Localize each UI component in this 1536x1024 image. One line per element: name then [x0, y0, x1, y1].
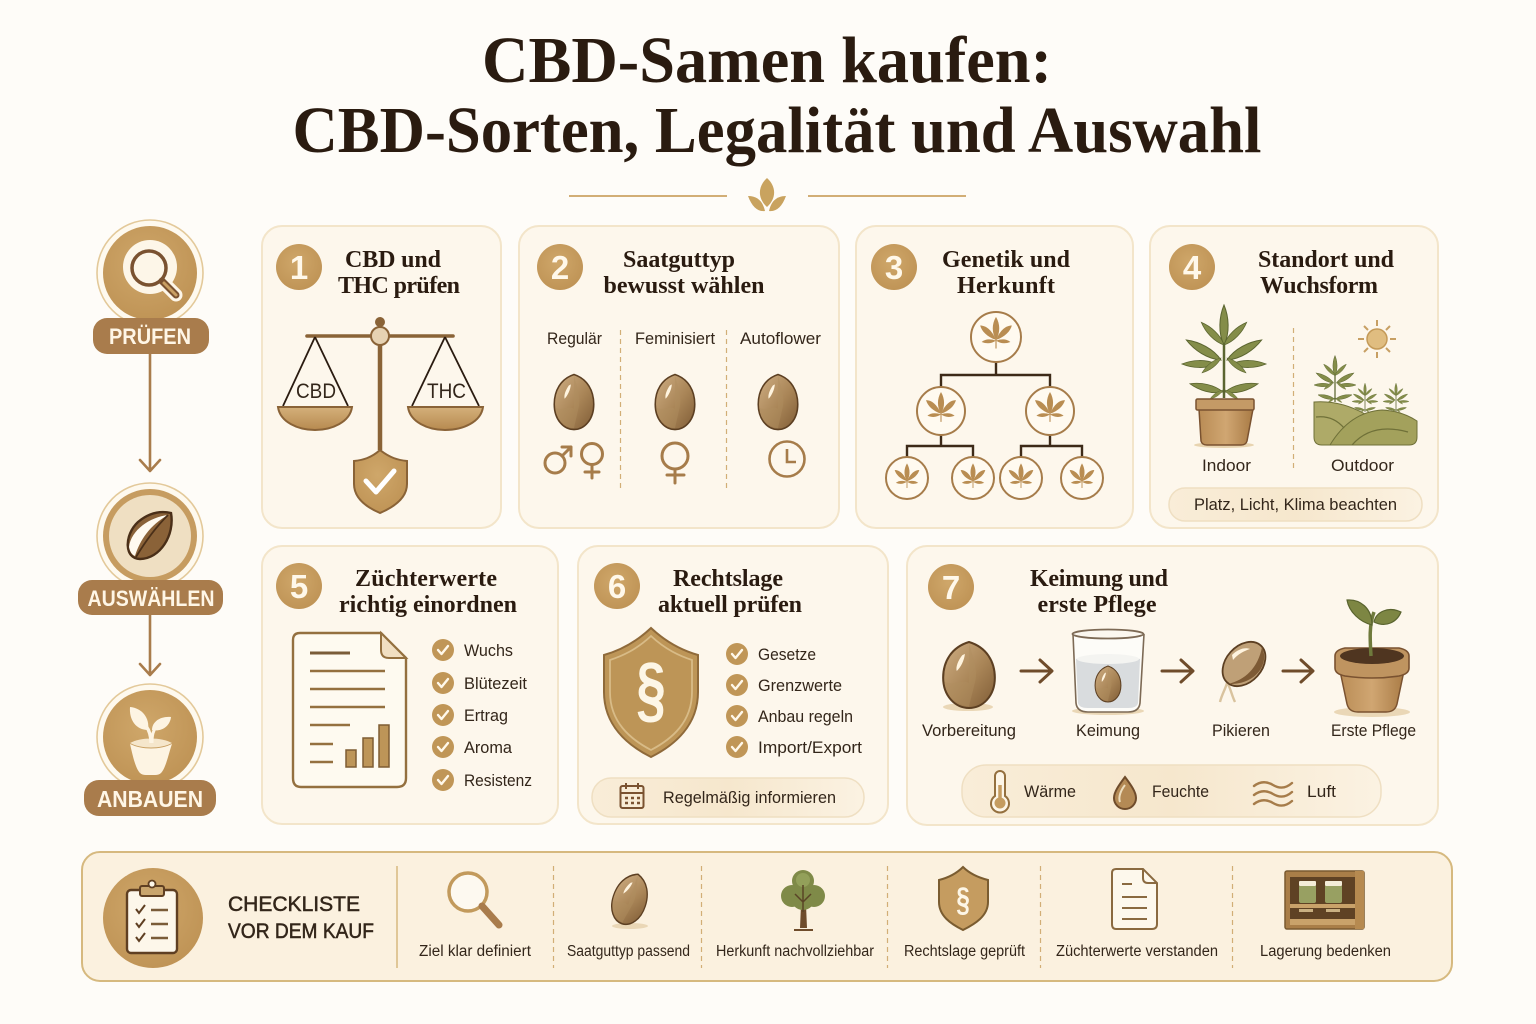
heading 2: bewusst wählen — [604, 273, 764, 299]
checklist: breeder values: Aroma — [464, 739, 513, 757]
item: Rechtslage geprüft — [904, 867, 1026, 960]
step: Pikieren — [1212, 633, 1274, 740]
number badge 7: 7 — [942, 569, 960, 606]
item: Lagerung bedenken — [1260, 871, 1391, 960]
arrow: Auswählen to Anbauen — [140, 615, 160, 675]
number badge 3: 3 — [885, 249, 903, 286]
icon: balance scale: CBD — [296, 380, 336, 403]
title: CBD-Samen kaufen: — [482, 24, 1052, 97]
icon: document with bar chart — [293, 633, 406, 787]
heading 1: THC prüfen — [338, 273, 460, 299]
step: Keimung: Keimung — [1076, 722, 1140, 740]
callout: Regelmäßig informieren: Regelmäßig informieren — [663, 789, 836, 807]
icon: shield with check — [354, 450, 407, 513]
item: Lagerung bedenken: Lagerung bedenken — [1260, 943, 1391, 960]
number badge 5 — [276, 563, 322, 609]
seed type: Autoflower: Autoflower — [740, 330, 822, 348]
icon: water drop — [1114, 777, 1136, 809]
heading 3 — [942, 247, 1071, 299]
illustration: outdoor plants on hills with sun — [1314, 320, 1417, 475]
process step: Auswählen — [78, 483, 223, 615]
heading: Checkliste: CHECKLISTE — [228, 893, 360, 916]
icon: balance scale: THC — [427, 380, 466, 403]
heading 7: erste Pflege — [1038, 592, 1157, 618]
arrow — [1162, 660, 1193, 682]
step: Vorbereitung — [922, 642, 1016, 740]
illustration: indoor potted plant: Indoor — [1202, 457, 1252, 475]
title divider with leaf ornament — [569, 178, 966, 211]
callout: Regelmäßig informieren — [592, 778, 864, 817]
title — [292, 24, 1262, 167]
item: Ziel klar definiert — [419, 873, 532, 960]
checklist: legal topics — [726, 643, 862, 758]
checklist: legal topics: Import/Export — [758, 739, 862, 757]
heading 1: CBD und — [345, 247, 442, 273]
label pill: Anbauen: ANBAUEN — [97, 786, 203, 812]
seed type: Autoflower — [740, 330, 822, 476]
checklist: legal topics: Grenzwerte — [758, 677, 842, 695]
icon: seed badge — [97, 483, 203, 589]
seed type: Regulär — [545, 330, 602, 478]
process step: Anbauen — [84, 684, 216, 816]
heading 6: aktuell prüfen — [658, 592, 802, 618]
item: Saatguttyp passend: Saatguttyp passend — [567, 943, 690, 960]
heading: Checkliste: VOR DEM KAUF — [228, 920, 374, 943]
checklist: breeder values: Blütezeit — [464, 675, 527, 693]
icon: shield with paragraph sign — [604, 628, 698, 757]
heading 2: Saatguttyp — [623, 247, 735, 273]
number badge 4: 4 — [1183, 249, 1202, 286]
icon: thermometer — [991, 771, 1009, 812]
checklist: breeder values — [432, 639, 532, 791]
icon: calendar — [620, 783, 644, 808]
heading 4: Wuchsform — [1260, 273, 1378, 299]
panel: 1 CBD und THC prüfen — [262, 226, 501, 528]
icon: sprout in pot badge — [97, 684, 203, 790]
number badge 1: 1 — [290, 249, 308, 286]
panel: 7 Keimung und erste Pflege — [907, 546, 1438, 825]
item: Züchterwerte verstanden: Züchterwerte verstanden — [1056, 943, 1218, 960]
callout: Wärme, Feuchte, Luft: Feuchte — [1152, 783, 1209, 801]
icon: clipboard badge — [103, 868, 203, 968]
heading 6 — [658, 566, 802, 618]
seed type: Feminisiert — [635, 330, 715, 483]
callout: Platz, Licht, Klima — [1169, 488, 1422, 521]
heading 5 — [339, 566, 517, 618]
arrow: Prüfen to Auswählen — [140, 354, 160, 471]
callout: Wärme, Feuchte, Luft: Wärme — [1024, 783, 1076, 801]
title: CBD-Sorten, Legalität und Auswahl — [292, 94, 1262, 167]
step: Vorbereitung: Vorbereitung — [922, 722, 1016, 740]
panel: 6 Rechtslage aktuell prüfen — [578, 546, 888, 824]
seed type: Feminisiert: Feminisiert — [635, 330, 715, 348]
number badge 1 — [276, 244, 322, 290]
family tree diagram — [886, 312, 1103, 499]
step: Keimung — [1072, 630, 1144, 740]
item: Herkunft nachvollziehbar: Herkunft nachvollziehbar — [716, 943, 874, 960]
checklist: breeder values: Ertrag — [464, 707, 508, 725]
number badge 3 — [871, 244, 917, 290]
icon: air waves — [1254, 782, 1292, 806]
heading 2 — [604, 247, 764, 299]
arrow — [1021, 660, 1052, 682]
illustration: outdoor plants on hills with sun: Outdoor — [1331, 457, 1395, 475]
item: Ziel klar definiert: Ziel klar definiert — [419, 943, 532, 960]
step: Pikieren: Pikieren — [1212, 722, 1270, 740]
checklist: legal topics: Anbau regeln — [758, 708, 853, 726]
heading 4 — [1258, 247, 1395, 299]
heading: Checkliste — [228, 893, 374, 943]
icon: magnifier badge — [97, 220, 203, 326]
number badge 4 — [1169, 244, 1215, 290]
checklist: breeder values: Resistenz — [464, 772, 532, 790]
item: Rechtslage geprüft: § — [956, 881, 970, 919]
heading 7 — [1030, 566, 1169, 618]
heading 1 — [338, 247, 460, 299]
item: Saatguttyp passend — [567, 869, 690, 960]
checklist: breeder values: Wuchs — [464, 642, 513, 660]
heading 3: Herkunft — [957, 273, 1055, 299]
arrow — [1283, 660, 1313, 682]
item: Herkunft nachvollziehbar — [716, 870, 874, 960]
number badge 5: 5 — [290, 568, 308, 605]
heading 6: Rechtslage — [673, 566, 783, 592]
number badge 6: 6 — [608, 568, 626, 605]
panel: Checkliste vor dem Kauf — [82, 852, 1452, 981]
illustration: indoor potted plant — [1182, 305, 1266, 475]
heading 4: Standort und — [1258, 247, 1395, 273]
number badge 7 — [928, 564, 974, 610]
heading 7: Keimung und — [1030, 566, 1169, 592]
number badge 6 — [594, 563, 640, 609]
heading 5: richtig einordnen — [339, 592, 517, 618]
panel: 5 Züchterwerte richtig einordnen — [262, 546, 558, 824]
callout: Wärme, Feuchte, Luft — [962, 765, 1381, 817]
icon: balance scale — [278, 317, 483, 450]
item: Züchterwerte verstanden — [1056, 869, 1218, 960]
step: Erste Pflege: Erste Pflege — [1331, 722, 1416, 740]
heading 3: Genetik und — [942, 247, 1071, 273]
seed type: Regulär: Regulär — [547, 330, 602, 348]
process step: Prüfen — [93, 220, 209, 354]
label pill: Auswählen — [78, 580, 223, 615]
number badge 2: 2 — [551, 249, 569, 286]
callout: Wärme, Feuchte, Luft: Luft — [1307, 783, 1336, 801]
icon: shield with paragraph sign: § — [636, 647, 666, 730]
panel: 3 Genetik und Herkunft — [856, 226, 1133, 528]
step: Erste Pflege — [1331, 600, 1416, 740]
checklist: legal topics: Gesetze — [758, 646, 816, 664]
panel: 2 Saatguttyp bewusst wählen — [519, 226, 839, 528]
callout: Platz, Licht, Klima: Platz, Licht, Klima beachten — [1194, 496, 1397, 514]
panel: 4 Standort und Wuchsform — [1150, 226, 1438, 528]
number badge 2 — [537, 244, 583, 290]
item: Rechtslage geprüft: Rechtslage geprüft — [904, 943, 1026, 960]
heading 5: Züchterwerte — [355, 566, 497, 592]
label pill: Prüfen: PRÜFEN — [109, 324, 191, 349]
label pill: Auswählen: AUSWÄHLEN — [88, 586, 214, 611]
